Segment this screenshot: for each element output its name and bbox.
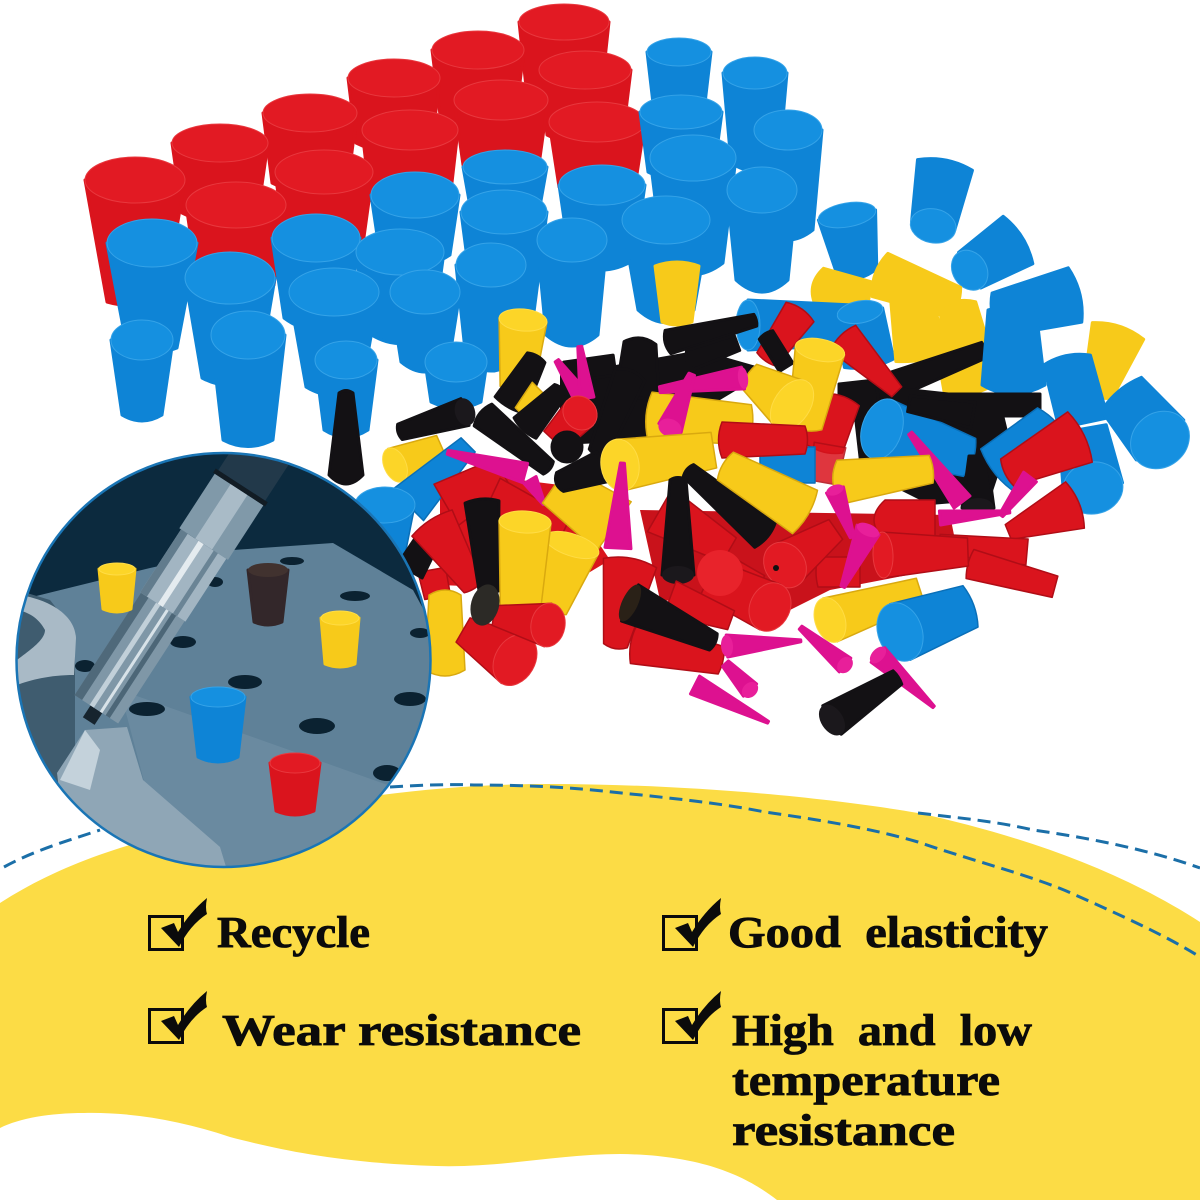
plug: blue [191,687,245,762]
plug: red [270,753,320,815]
dashed wave lines [4,785,1200,957]
feature: Recycle [150,898,370,957]
feature: High and low temperature resistance: temperature [732,1056,1000,1105]
plugs: blue rows [107,38,822,484]
yellow wave panel [0,784,1200,1200]
metal plate [36,543,430,866]
feature: Recycle: Recycle [217,908,370,957]
plug: yellow right [321,611,359,667]
feature: High and low temperature resistance [664,991,1032,1155]
plugs: black and red masses under the pile [440,350,1010,610]
feature: High and low temperature resistance: High and low [732,1006,1032,1055]
nozzle [74,454,288,725]
workpiece ring [17,590,75,790]
inset photo: nozzle over perforated plate with plugs [18,454,430,866]
feature: Wear resistance [150,991,581,1055]
feature: High and low temperature resistance: resistance [732,1106,955,1155]
feature: Wear resistance: Wear resistance [222,1006,581,1055]
plugs: middle of the pile [355,391,1096,565]
plug: brown [248,563,288,625]
plug: yellow left [99,563,135,612]
plugs: loose blue and yellow on the right [736,155,1200,519]
plugs: red and yellow front layer [398,462,1089,740]
inset circle rim [16,453,430,867]
water and cut surface [57,727,226,866]
feature: Good elasticity [664,898,1048,957]
plate holes [75,557,430,781]
plugs: black and pink pile, back layer [493,299,909,485]
plugs: red row [85,4,645,305]
feature: Good elasticity: Good elasticity [728,908,1048,957]
